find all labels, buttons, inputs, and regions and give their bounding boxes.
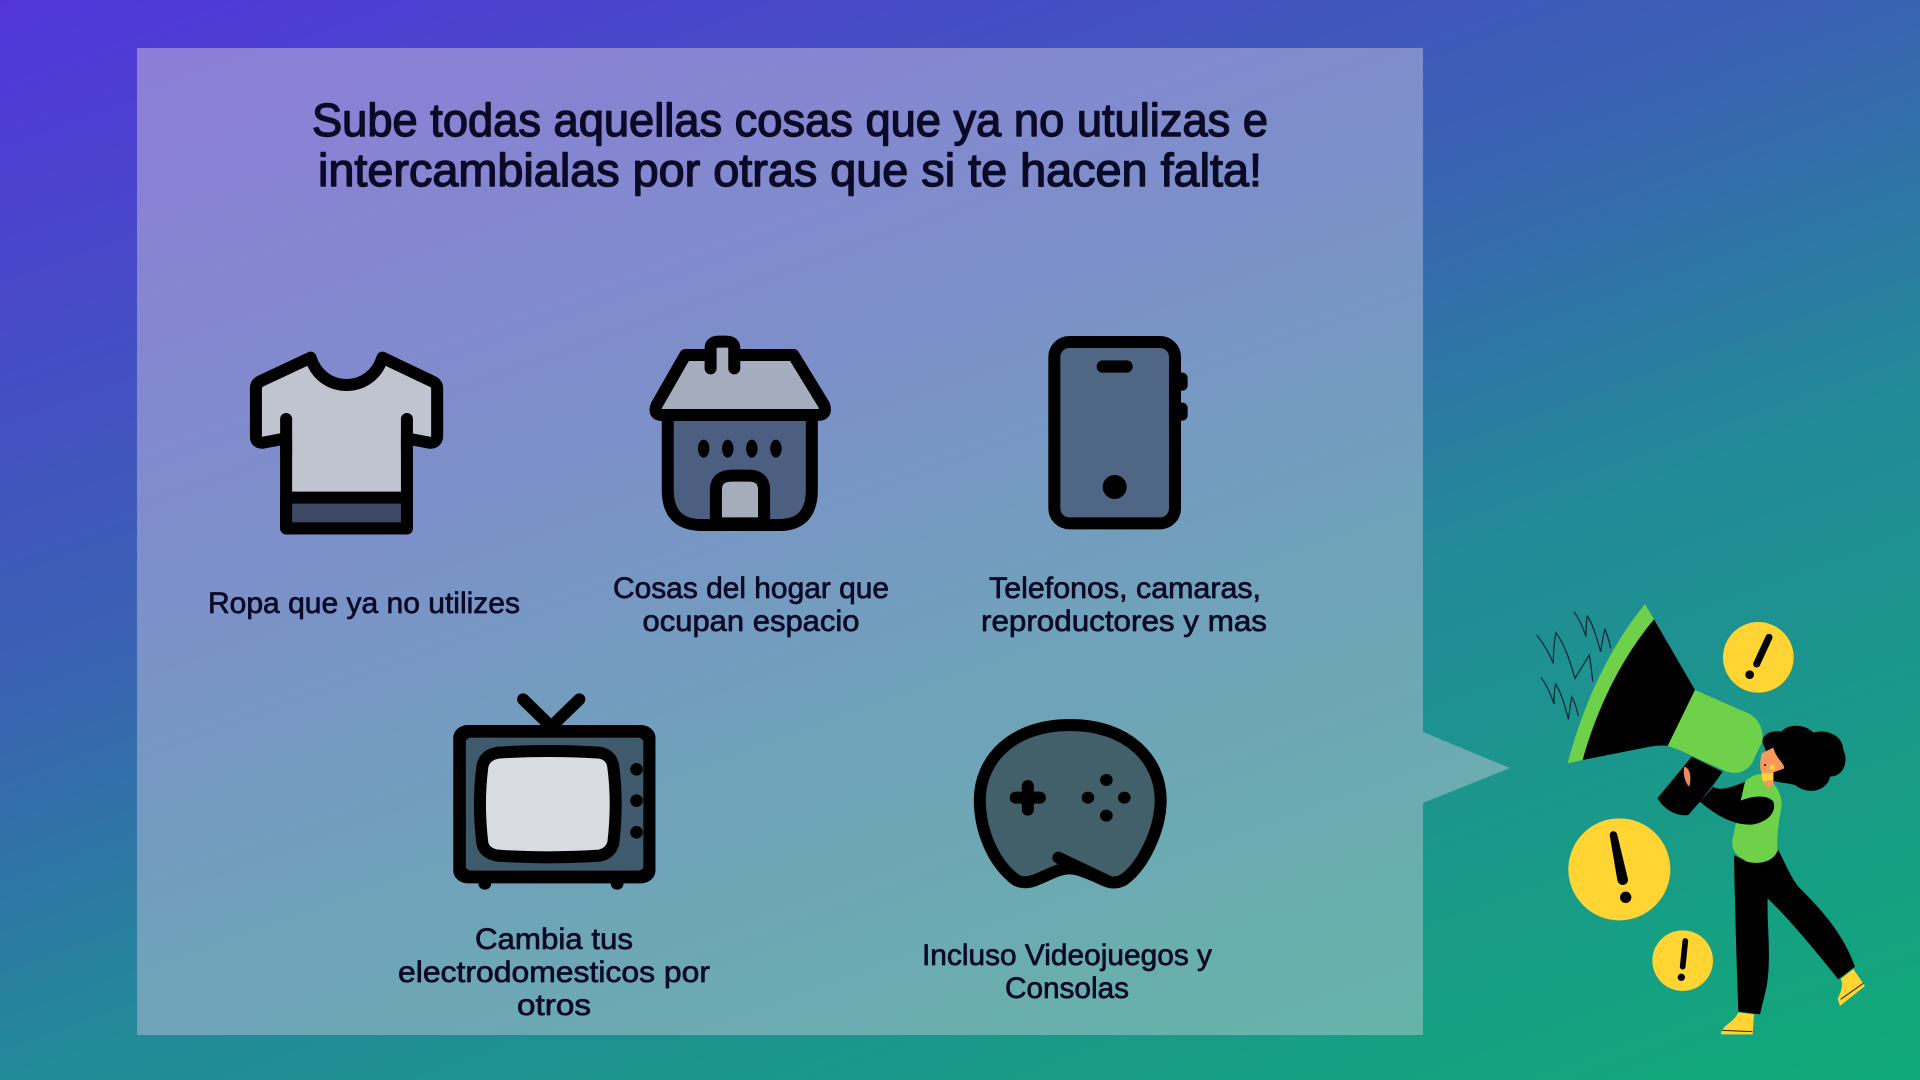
label: appliances: Cambia tus (475, 923, 633, 956)
label: video games: Incluso Videojuegos y (922, 939, 1212, 972)
title: Sube todas aquellas cosas que ya no utulizas e (312, 94, 1268, 146)
label: video games: Consolas (1005, 972, 1129, 1005)
label: appliances (398, 923, 710, 1022)
icon: house (655, 342, 825, 525)
label: clothes: Ropa que ya no utilizes (208, 587, 520, 620)
megaphone (1568, 604, 1763, 815)
label: electronics (981, 572, 1267, 638)
label: electronics: reproductores y mas (981, 605, 1267, 638)
title (312, 94, 1268, 196)
label: home items: Cosas del hogar que (613, 572, 889, 605)
label: home items: ocupan espacio (642, 605, 860, 638)
icon: t-shirt (256, 358, 437, 528)
woman (1684, 726, 1865, 1034)
label: home items (613, 572, 889, 638)
panel: speech bubble (137, 48, 1510, 1035)
label: electronics: Telefonos, camaras, (989, 572, 1261, 605)
illustration: woman with megaphone (1537, 604, 1865, 1034)
label: video games (922, 939, 1212, 1005)
icon: alert top (1723, 622, 1794, 693)
title: intercambialas por otras que si te hacen falta! (318, 144, 1262, 196)
icon: game controller (980, 725, 1161, 882)
icon: television (453, 699, 655, 890)
label: appliances: electrodomesticos por (398, 956, 710, 989)
sound waves (1537, 612, 1611, 719)
icon: smartphone (1054, 342, 1188, 523)
icon: alert small (1652, 930, 1713, 991)
label: appliances: otros (517, 989, 591, 1022)
icon: alert large (1568, 818, 1670, 920)
